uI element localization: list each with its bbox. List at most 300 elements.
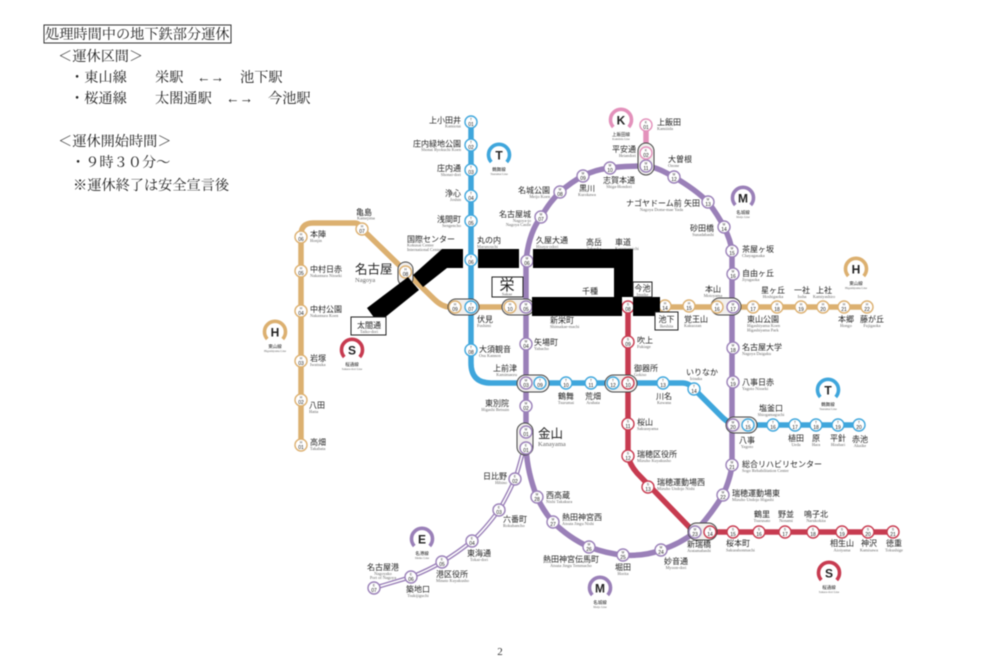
- station K02: [612, 144, 652, 159]
- station H18: H: [776, 302, 779, 306]
- stations: Higashiyama line: [295, 207, 884, 451]
- logo: Higashiyama line left: Higashiyama Line: [264, 349, 287, 353]
- station E02: [483, 471, 521, 485]
- text: end of closure note: ※運休終了は安全宣言後: [73, 177, 230, 194]
- station E03: [493, 504, 527, 528]
- station M01 Kanayama: [520, 426, 566, 448]
- station T15: 八事: [739, 435, 755, 445]
- station M24: 妙音通: [664, 556, 688, 566]
- subway map: [264, 109, 903, 609]
- station M03: Kamimaezu: [496, 372, 518, 377]
- station box: Imaike: 今池: [634, 283, 650, 293]
- station E01: [520, 442, 532, 454]
- logo: Higashiyama line left: [264, 321, 287, 353]
- station T09: [534, 377, 546, 389]
- station H19: Issha: [798, 294, 807, 299]
- station H01: Takabata: [310, 446, 326, 451]
- station H06: 06: [298, 237, 304, 243]
- station M06: 06: [524, 261, 530, 267]
- station H22: H: [866, 302, 869, 306]
- station H18: [761, 286, 785, 313]
- station H17: 東山公園: [747, 314, 779, 324]
- station M10: 10: [607, 168, 613, 174]
- station T20: 20: [856, 425, 862, 431]
- station S15: 桜本町: [726, 538, 750, 548]
- line: Kamiiida line: [643, 125, 649, 153]
- station H17: Higashiyama Park: [747, 328, 779, 332]
- station M21: M: [731, 460, 734, 464]
- station H04: 中村公園: [310, 304, 342, 314]
- station M15: M: [731, 246, 734, 250]
- station T11: T: [590, 378, 592, 382]
- station E05: 港区役所: [436, 569, 468, 579]
- station S09: S: [627, 338, 629, 342]
- station M25: Horita: [618, 571, 629, 576]
- station H07: 亀島: [356, 207, 372, 217]
- station S18: 鳴子北: [804, 509, 828, 519]
- station M23: M: [694, 528, 697, 532]
- station M01 Kanayama: 01: [523, 432, 529, 438]
- station T13: 13: [660, 383, 666, 389]
- station K01: 01: [643, 125, 649, 131]
- logo: Tsurumai line upper: Tsurumai Line: [490, 172, 508, 176]
- station M12: [668, 154, 692, 183]
- station H16: 16: [714, 307, 720, 313]
- station H04: [295, 304, 342, 318]
- station H10: H: [509, 302, 512, 306]
- station M24: M: [660, 546, 663, 550]
- station H09: [449, 301, 461, 313]
- station S09: 09: [625, 342, 631, 348]
- station S20: [860, 526, 878, 552]
- station S15: Sakurahonmachi: [726, 548, 756, 552]
- station M09: 09: [580, 176, 586, 182]
- station label: Takaoka: Takaoka: [587, 246, 601, 251]
- logo: Sakura-dori line lower: 桜通線: [822, 584, 836, 591]
- station M22: [717, 488, 780, 502]
- station label: Shinsakae-machi: 新栄町: [550, 315, 574, 325]
- station T13: [656, 377, 672, 405]
- station M28: 西高蔵: [546, 490, 570, 500]
- station M02: 東別院: [485, 398, 509, 408]
- station E07: [367, 562, 399, 594]
- station T02: Shonai Ryokuchi Koen: [421, 147, 462, 152]
- station K02: K: [645, 148, 648, 152]
- station M11: M: [645, 162, 648, 166]
- station H06: 本陣: [310, 229, 326, 239]
- station H22: Fujigaoka: [863, 323, 881, 328]
- station label: Kokusai Center: International Center: [407, 247, 442, 252]
- station M20: 20: [730, 425, 736, 431]
- station M17: M: [732, 302, 735, 306]
- station H15: 覚王山: [684, 314, 708, 324]
- station M19: Yagoto Nisseki: [742, 386, 769, 391]
- station S18: 18: [810, 532, 816, 538]
- logo: Meijo line lower: [590, 577, 610, 609]
- station M07: Nagoya-jo: [513, 218, 531, 223]
- station M21: 総合リハビリセンター: [742, 459, 822, 469]
- station M08: M: [559, 188, 562, 192]
- station S13: 13: [645, 487, 651, 493]
- line: Higashiyama line: [301, 223, 867, 445]
- station H10: [504, 301, 516, 313]
- line: Tsurumai line: [471, 122, 859, 425]
- station H21: H: [843, 302, 846, 306]
- station M04: 矢場町: [534, 337, 558, 347]
- station T07 Fushimi: [465, 301, 493, 328]
- station T09: 09: [537, 383, 543, 389]
- logo: Sakura-dori line lower: S: [825, 566, 833, 580]
- station S14: [704, 526, 716, 538]
- station S13: [642, 477, 705, 493]
- station H02: 02: [298, 400, 304, 406]
- station T10: Tsurumai: [558, 400, 575, 405]
- station M02: Higashi Betsuin: [481, 407, 510, 412]
- station M27: 熱田神宮西: [562, 512, 602, 522]
- station S17: Nonami: [779, 518, 794, 523]
- station K01: Kamiiida: [657, 126, 673, 131]
- station S18: Narukokita: [806, 518, 826, 523]
- station E05: E: [441, 558, 443, 562]
- station M13: 13: [705, 202, 711, 208]
- station T07 Fushimi: 伏見: [477, 314, 493, 324]
- page number: 2: [497, 646, 503, 658]
- station H20: 上社: [816, 285, 832, 295]
- logo: Kamiiida line: Kamiiida Line: [612, 137, 630, 141]
- station M18: [727, 342, 782, 356]
- station T16: T: [772, 420, 774, 424]
- line: Sakura-dori line: [628, 307, 893, 532]
- station S08: S: [627, 302, 629, 306]
- station box: Taiko-dori: Taiko-dori: [360, 329, 379, 334]
- station S16: 鶴里: [754, 509, 770, 519]
- station H06: Honjin: [310, 238, 323, 243]
- station H02: 八田: [309, 401, 325, 410]
- station M06: M: [526, 256, 529, 260]
- station H05: H: [300, 266, 303, 270]
- station H03: H: [300, 356, 303, 360]
- text: Higashiyama line section: 栄駅: [155, 70, 183, 86]
- station M14: 14: [721, 227, 727, 233]
- station T15: Yagoto: [741, 444, 753, 449]
- station K02: 平安通: [612, 144, 636, 154]
- station T10: 10: [563, 383, 569, 389]
- station M19: 八事日赤: [742, 377, 774, 387]
- logo: Kamiiida line: 上飯田線: [612, 131, 630, 138]
- station M12: 12: [671, 177, 677, 183]
- station T03: T: [470, 166, 472, 170]
- station M03: M: [525, 378, 528, 382]
- station S10: 10: [625, 383, 631, 389]
- station S20: Kamisawa: [860, 548, 878, 552]
- station M06: 久屋大通: [536, 235, 568, 245]
- station S11: [622, 417, 658, 431]
- station label: Shinsakae-machi: [550, 315, 580, 329]
- station M14: [690, 221, 730, 237]
- station M24: Myoon-dori: [666, 565, 687, 570]
- station K01: 上飯田: [657, 118, 681, 127]
- station M08: [518, 185, 566, 199]
- text: start time: ・９時３０分～: [71, 154, 170, 171]
- logo: Meijo line upper: Meijo Line: [736, 215, 750, 219]
- station H21: 21: [841, 307, 847, 313]
- station H16: [704, 284, 723, 313]
- station E07: Port of Nagoya: [370, 575, 396, 580]
- station E06: Tsukijiguchi: [407, 593, 430, 598]
- station H10: 10: [507, 307, 513, 313]
- station T20: [852, 419, 868, 448]
- station H15: 15: [686, 306, 692, 312]
- station H03: Iwatsuka: [310, 362, 326, 367]
- station T18: 原: [812, 434, 820, 443]
- station M18: Nagoya Daigaku: [742, 351, 772, 356]
- station H18: 星ヶ丘: [761, 286, 785, 295]
- station S10: 御器所: [634, 363, 658, 373]
- logo: Kamiiida line: [610, 109, 632, 141]
- station T04: T: [470, 192, 472, 196]
- station T18: T: [815, 420, 817, 424]
- station M22: M: [722, 490, 725, 494]
- station T06 Marunouchi: 丸の内: [477, 235, 501, 245]
- text: Higashiyama line section: [70, 69, 283, 86]
- text: Higashiyama line section: ←→: [197, 70, 224, 86]
- logo: Tsurumai line upper: 鶴舞線: [492, 166, 506, 173]
- logo: Meijo line upper: M: [738, 192, 748, 206]
- station M06: Hisaya-odori: [536, 244, 559, 249]
- station M23: Aratamabashi: [687, 548, 712, 553]
- station T10: 鶴舞: [558, 391, 574, 401]
- text: Sakura-dori line section: 太閤通駅: [155, 90, 212, 107]
- station M16: M: [732, 270, 735, 274]
- station E03: 03: [496, 510, 502, 516]
- station H01: 01: [298, 445, 304, 451]
- station E04: [466, 535, 491, 562]
- station T17: 植田: [788, 433, 804, 443]
- station S12: 瑞穂区役所: [637, 449, 677, 459]
- station label: Kokusai Center: 国際センター: [407, 234, 455, 244]
- station T02: 02: [468, 145, 474, 151]
- station T08: Osu Kannon: [479, 353, 501, 358]
- station E05: Minato Kuyakusho: [436, 578, 469, 583]
- text: Higashiyama line section: ・東山線: [70, 69, 127, 86]
- station S15: 15: [730, 532, 736, 538]
- logo: Meijo line lower: 名城線: [593, 599, 607, 606]
- station M27: Atsuta Jingu Nishi: [562, 521, 595, 526]
- station S09: 吹上: [637, 335, 653, 345]
- station M01 Kanayama: 金山: [538, 427, 563, 441]
- station S20: 神沢: [861, 538, 877, 548]
- logo: Meiko line: Meiko Line: [415, 556, 430, 560]
- logo: Higashiyama line right: [845, 258, 868, 290]
- station E02: 日比野: [483, 471, 507, 481]
- station T20: 赤池: [852, 434, 868, 444]
- logo: Meijo line upper: [732, 187, 754, 219]
- station H05: Nakamura Nisseki: [310, 273, 343, 278]
- station M03: [493, 363, 532, 389]
- station M21: 21: [729, 465, 735, 471]
- station H06: H: [300, 232, 303, 236]
- station S19: S: [841, 528, 843, 532]
- station E06: 築地口: [406, 584, 430, 594]
- station T08: 大須観音: [479, 344, 511, 354]
- station S15: S: [732, 528, 734, 532]
- station E02: E: [514, 474, 516, 478]
- station T07 Fushimi: 07: [468, 307, 474, 313]
- station S11: S: [627, 420, 629, 424]
- logo: Higashiyama line left: H: [271, 326, 279, 340]
- logo: Sakura-dori line left: [342, 339, 363, 371]
- station M10: M: [609, 164, 612, 168]
- station M07: [499, 209, 547, 227]
- station M10: Shiga-Hondori: [606, 184, 633, 189]
- title: 処理時間中の地下鉄部分運休: [45, 26, 229, 43]
- station K02: Heiandori: [619, 153, 637, 158]
- station T01: 01: [468, 122, 474, 128]
- text block: closure notice: [44, 25, 311, 194]
- station H02: H: [300, 396, 303, 400]
- station box: Imaike: Imaike: [637, 292, 649, 297]
- interchange capsules: [398, 143, 757, 540]
- station E02: Hibino: [495, 480, 507, 485]
- station M06: [521, 235, 568, 267]
- station M16: 16: [730, 274, 736, 280]
- station M25: 堀田: [615, 563, 631, 572]
- stations: Tsurumai line: [413, 115, 868, 449]
- station K01: [640, 118, 681, 131]
- station T19: 19: [835, 425, 841, 431]
- logo: Higashiyama line right: 東山線: [849, 280, 863, 287]
- station S11: 11: [625, 424, 631, 430]
- station M04: M: [525, 340, 528, 344]
- text: Higashiyama line section: 池下駅: [240, 70, 283, 86]
- station T16: [758, 403, 785, 431]
- station box: Sakae: Sakae: [502, 292, 512, 296]
- station H04: H: [300, 306, 303, 310]
- station S08: [622, 301, 634, 313]
- stations: Meijo line: [481, 154, 822, 576]
- station box: Sakae: 栄: [499, 277, 515, 294]
- station M14: 砂田橋: [690, 223, 714, 233]
- station S21: 徳重: [886, 538, 902, 548]
- station H17: Higashiyama Koen: [747, 323, 781, 328]
- station T12: T: [612, 378, 614, 382]
- station H17: [747, 301, 781, 332]
- station M26: 26: [586, 547, 592, 553]
- station M04: [520, 337, 558, 351]
- station M01 Kanayama: M: [525, 428, 528, 432]
- station M25: M: [622, 550, 625, 554]
- station M10: 志賀本通: [603, 175, 635, 185]
- station H02: Hatta: [309, 409, 318, 414]
- station H19: H: [800, 302, 803, 306]
- station T08: [465, 344, 511, 358]
- station S19: 19: [839, 532, 845, 538]
- logo: Tsurumai line right: Tsurumai Line: [819, 407, 837, 411]
- station H09: H: [454, 302, 457, 306]
- station K01: K: [645, 120, 648, 124]
- station T08: 08: [468, 350, 474, 356]
- station M12: Ozone: [668, 163, 679, 168]
- station T04: Joshin: [450, 197, 462, 202]
- station T11: 11: [588, 383, 594, 389]
- station M26: 熱田神宮伝馬町: [543, 554, 599, 564]
- station M24: 24: [658, 550, 664, 556]
- station H09: 09: [452, 307, 458, 313]
- station K02: 02: [643, 153, 649, 159]
- station S16: Tsurusato: [754, 518, 770, 523]
- station M05: [520, 301, 532, 313]
- station T12: [607, 377, 619, 389]
- station S17: S: [784, 528, 786, 532]
- station S08: 08: [625, 307, 631, 313]
- station M27: 27: [550, 522, 556, 528]
- station T06 Marunouchi: [465, 235, 501, 266]
- station T04: 04: [468, 196, 474, 202]
- station M13: ナゴヤドーム前 矢田: [626, 198, 700, 208]
- logo: Higashiyama line right: H: [852, 262, 860, 276]
- station M15: 15: [729, 251, 735, 257]
- station H19: 19: [798, 307, 804, 313]
- station M09: M: [582, 172, 585, 176]
- station M08: Meijo Koen: [529, 194, 551, 199]
- station M11: [640, 160, 652, 172]
- station S13: S: [647, 482, 649, 486]
- logo: Meiko line: 名港線: [415, 550, 429, 557]
- station box: Taiko-dori: 太閤通: [357, 320, 381, 330]
- station label: Takaoka: [586, 237, 602, 251]
- station S19: 相生山: [830, 538, 854, 548]
- station T04: [445, 188, 477, 202]
- station H16: Motoyama: [704, 293, 722, 298]
- logo: Sakura-dori line left: S: [348, 344, 356, 358]
- logo: Meiko line: E: [418, 532, 426, 546]
- station T14: Irinaka: [690, 376, 702, 381]
- station T16: 16: [770, 425, 776, 431]
- station S14: S: [709, 528, 711, 532]
- station M01 Kanayama: Kanayama: [538, 441, 566, 448]
- logo: Meijo line lower: M: [595, 582, 605, 596]
- station M26: [543, 541, 599, 568]
- station T14: 14: [691, 389, 697, 395]
- station M25: 25: [620, 555, 626, 561]
- station M23: [687, 526, 712, 553]
- station H16: 本山: [705, 284, 721, 294]
- station T06 Marunouchi: 06: [468, 260, 474, 266]
- station M15: [726, 244, 774, 258]
- text: Sakura-dori line section: ←→: [226, 91, 253, 107]
- station M26: Atsuta Jingu Temmacho: [550, 563, 592, 568]
- station T18: [810, 419, 822, 447]
- station M04: 04: [523, 344, 529, 350]
- station M04: Yabacho: [534, 346, 549, 351]
- station M13: M: [707, 198, 710, 202]
- station H20: [813, 285, 835, 313]
- station M15: Chayagasaka: [742, 253, 765, 258]
- station T03: 庄内通: [437, 163, 461, 173]
- station label: Kurumamichi: [615, 237, 640, 251]
- station M03: 上前津: [493, 363, 517, 373]
- station M02: [481, 398, 532, 412]
- station E04: 04: [469, 541, 475, 547]
- station H05: 中村日赤: [310, 264, 342, 274]
- station M07: Nagoya Castle: [506, 222, 531, 227]
- station label: Kokusai Center: [407, 234, 455, 252]
- station H06: [295, 229, 326, 243]
- station M12: M: [673, 172, 676, 176]
- station H19: 一社: [794, 285, 810, 295]
- station E03: E: [498, 506, 500, 510]
- station M21: [726, 459, 822, 473]
